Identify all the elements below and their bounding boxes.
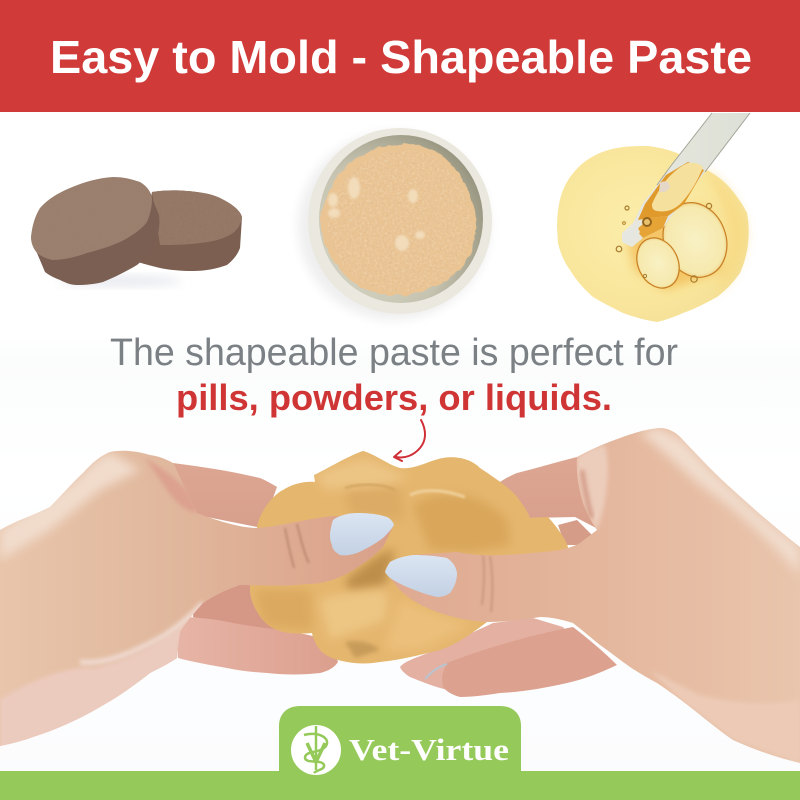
tagline emphasis: pills, powders, or liquids. xyxy=(176,377,612,418)
image: powder bowl xyxy=(298,128,492,320)
paste xyxy=(250,451,568,664)
tagline: The shapeable paste is perfect for xyxy=(110,332,678,374)
hands kneading paste xyxy=(0,428,800,763)
footer bar xyxy=(0,771,800,800)
logo tab xyxy=(279,706,521,775)
right hand xyxy=(385,428,800,763)
left hand xyxy=(0,451,394,750)
arrow xyxy=(394,420,425,461)
image: pills xyxy=(31,177,242,286)
left hand back fingers xyxy=(173,463,338,674)
tagline xyxy=(110,332,678,418)
right thumbnail xyxy=(385,555,457,597)
right hand back fingers xyxy=(400,457,617,697)
oil bubbles xyxy=(616,194,737,295)
image: oil drop with dropper xyxy=(557,113,750,322)
title: Easy to Mold - Shapeable Paste xyxy=(50,31,752,83)
dropper xyxy=(622,113,750,247)
logo emblem xyxy=(291,725,341,775)
left thumbnail xyxy=(330,513,394,555)
fingernail edge xyxy=(425,664,447,679)
header banner xyxy=(0,0,800,112)
logo wordmark: Vet-Virtue xyxy=(349,732,509,767)
